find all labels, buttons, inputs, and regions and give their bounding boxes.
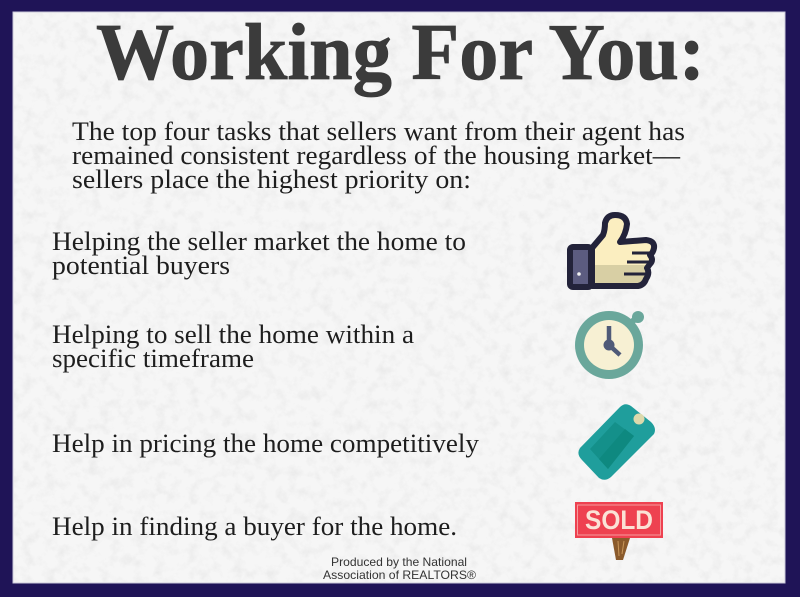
task 4 text: Help in finding a buyer for the home. xyxy=(52,512,457,541)
task 3 text: Help in pricing the home competitively xyxy=(52,429,479,458)
icon: sold sign xyxy=(575,502,663,560)
footer credit: Produced by the National xyxy=(331,555,467,569)
footer credit xyxy=(323,555,476,582)
intro paragraph: remained consistent regardless of the housing market— xyxy=(72,141,681,170)
task 1 text xyxy=(52,227,466,280)
icon: stopwatch xyxy=(575,311,644,379)
title: Working For You: xyxy=(96,9,705,97)
task 2 text: specific timeframe xyxy=(52,344,254,373)
intro paragraph xyxy=(72,117,685,194)
intro paragraph: The top four tasks that sellers want from their agent has xyxy=(72,117,685,146)
icon: sold sign: SOLD xyxy=(585,505,653,535)
icon: price tag xyxy=(578,404,655,480)
task 1 text: potential buyers xyxy=(52,251,230,280)
task 2 text xyxy=(52,320,414,373)
task 1 text: Helping the seller market the home to xyxy=(52,227,466,256)
icon: thumbs up xyxy=(570,215,654,287)
intro paragraph: sellers place the highest priority on: xyxy=(72,165,471,194)
footer credit: Association of REALTORS® xyxy=(323,568,476,582)
task 2 text: Helping to sell the home within a xyxy=(52,320,414,349)
